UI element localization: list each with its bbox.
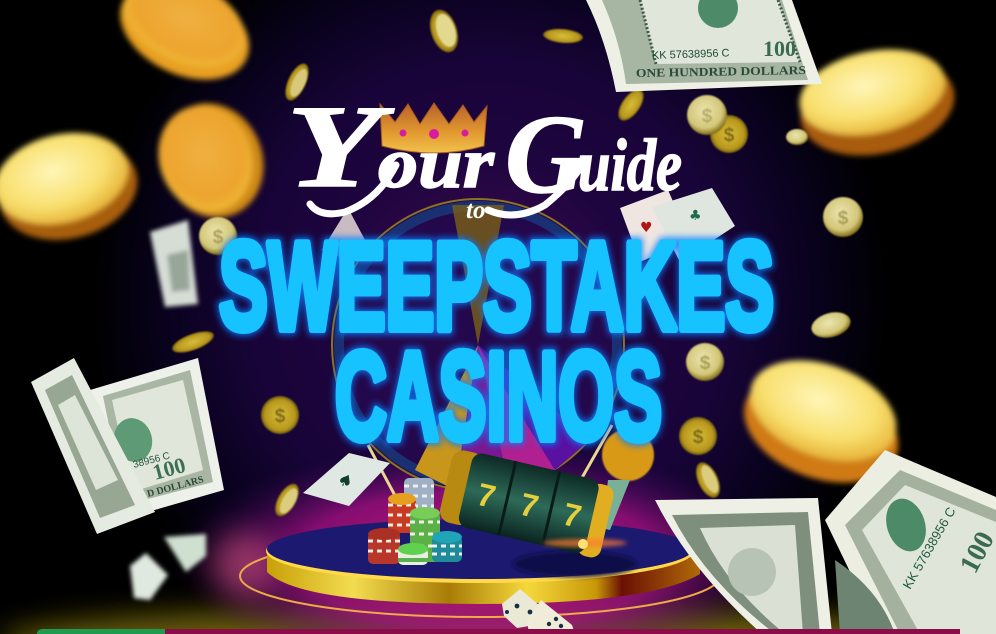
dice — [502, 589, 575, 634]
dollar bill left: 100 — [150, 452, 188, 485]
blurred big gold coins — [0, 0, 964, 503]
small gold coins: $ — [213, 227, 224, 248]
playing card lower left — [303, 453, 390, 506]
title: Sweepstakes Casinos: CASINOS — [335, 328, 662, 466]
small gold coins: $ — [700, 353, 711, 374]
small gold coins: $ — [702, 106, 713, 127]
dollar bill left: D DOLLARS — [146, 474, 205, 500]
slot machine 777: 7 — [517, 486, 542, 525]
dollar bill lower right: KK 57638956 C — [900, 505, 958, 592]
playing cards top right: ♣ — [689, 208, 702, 224]
prize wheel — [331, 198, 625, 505]
playing cards top right — [322, 188, 735, 262]
small gold coins — [170, 6, 863, 520]
dollar bill top: 100 — [763, 36, 796, 61]
dollar bill top: ONE HUNDRED DOLLARS — [636, 63, 806, 80]
dollar bill lower right — [655, 450, 996, 634]
playing cards top right: ♥ — [640, 220, 653, 236]
playing card lower left: ♠ — [333, 469, 357, 494]
title: Your Guide to — [286, 81, 682, 224]
slot machine 777: 7 — [474, 476, 499, 515]
small gold coins: $ — [693, 427, 704, 448]
dollar bill left — [31, 358, 224, 534]
title: Your Guide to: our — [378, 123, 495, 203]
title: Sweepstakes Casinos: CASINOS — [335, 328, 662, 466]
title: Your Guide to: to — [466, 197, 485, 224]
title: Your Guide to: uide — [578, 125, 682, 207]
title: Sweepstakes Casinos — [219, 218, 774, 466]
bottom bar — [37, 629, 960, 634]
slot machine 777 — [437, 429, 654, 559]
small gold coins: $ — [724, 125, 735, 146]
title: Your Guide to: G — [505, 93, 587, 217]
crown — [380, 103, 487, 153]
title: Your Guide to: Y — [286, 81, 395, 212]
golden platform — [240, 519, 720, 617]
dollar bill left: 38956 C — [132, 450, 171, 471]
poker chips — [368, 478, 462, 565]
dollar bill top — [586, 0, 822, 92]
blurred small bills — [130, 220, 206, 600]
small gold coins: $ — [275, 406, 286, 427]
small gold coins: $ — [838, 208, 849, 229]
slot machine 777: 7 — [559, 496, 585, 535]
dollar bill top: KK 57638956 C — [652, 47, 730, 62]
